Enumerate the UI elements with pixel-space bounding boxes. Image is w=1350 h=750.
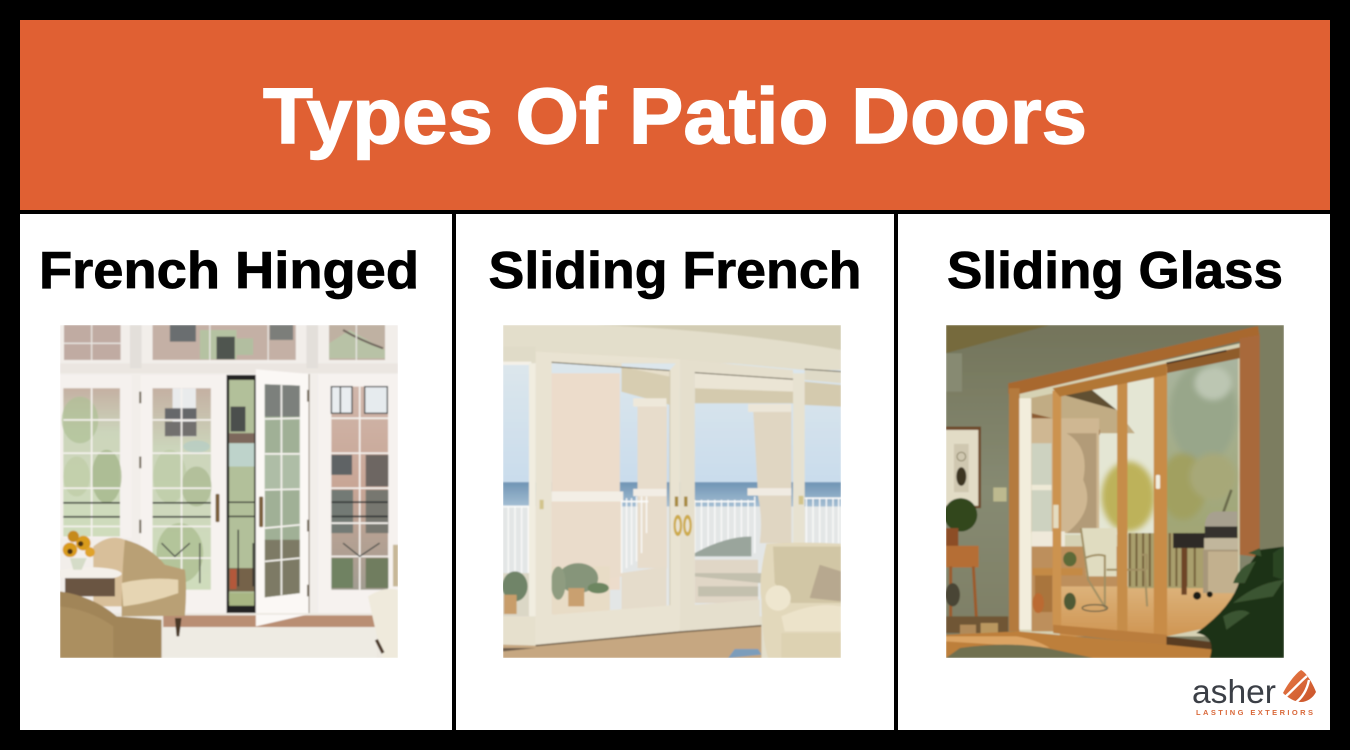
- logo tagline: LASTING EXTERIORS: [1196, 708, 1313, 717]
- heading: French Hinged: French Hinged: [39, 242, 419, 300]
- title: Types Of Patio Doors: [263, 71, 1087, 160]
- panel: Sliding French: [456, 214, 894, 730]
- logo mark: [1283, 670, 1316, 703]
- photo: sliding French doors: [503, 325, 841, 658]
- logo wordmark: asher: [1192, 673, 1276, 710]
- heading: Sliding French: Sliding French: [488, 242, 862, 300]
- photo: sliding glass door: [946, 325, 1284, 658]
- header banner: [20, 20, 1330, 210]
- logo: Asher Lasting Exteriors: [1192, 670, 1316, 717]
- heading: Sliding Glass: Sliding Glass: [947, 242, 1283, 300]
- photo: French hinged doors: [60, 325, 398, 658]
- panel: Sliding Glass: [898, 214, 1330, 730]
- door frame: [1166, 347, 1240, 373]
- panel: French Hinged: [20, 214, 452, 730]
